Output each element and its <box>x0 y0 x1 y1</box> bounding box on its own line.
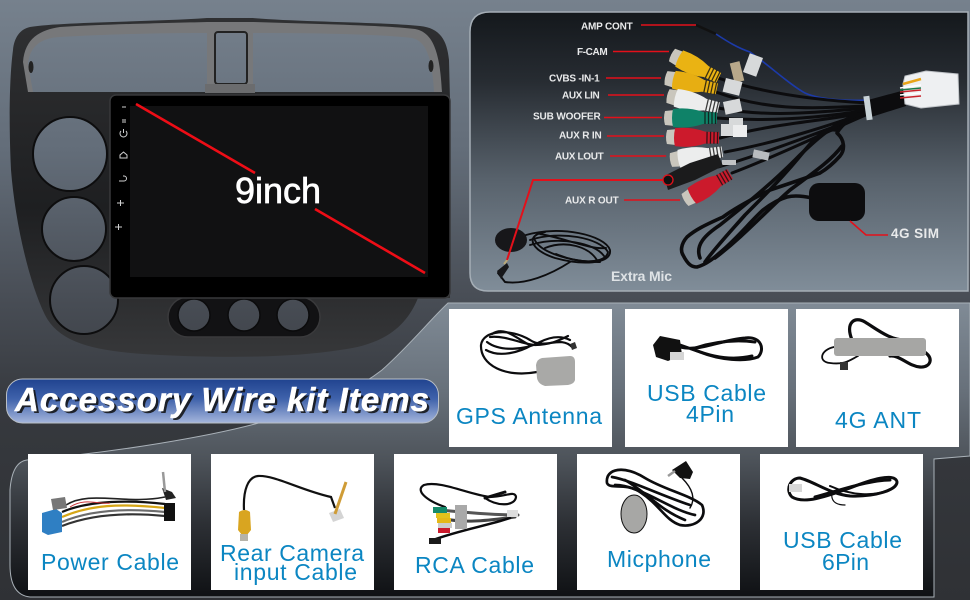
top silver trim <box>23 22 442 92</box>
round vent holes <box>33 117 118 334</box>
card: USB Cable 4Pin <box>625 309 788 447</box>
car head unit with dash frame <box>10 18 450 357</box>
screen bezel <box>110 95 450 298</box>
harness labels: 4G SIM <box>891 226 939 241</box>
4G SIM antenna cable <box>682 112 868 267</box>
wire tubes before connector <box>868 90 906 118</box>
mounting screws <box>28 60 434 73</box>
card: Rear Camera input Cable <box>211 454 374 590</box>
harness labels: SUB WOOFER <box>533 112 601 122</box>
card: Rear Camera input Cable: input Cable <box>234 559 358 585</box>
title banner: Accessory Wire kit Items <box>16 383 432 420</box>
leader lines <box>507 25 888 260</box>
card: USB Cable 4Pin: 4Pin <box>686 401 735 427</box>
lower buttons <box>178 299 309 331</box>
card: Power Cable <box>28 454 191 590</box>
title banner: Accessory Wire kit Items <box>14 381 429 418</box>
card: Micphone <box>577 454 740 590</box>
card: GPS Antenna <box>449 309 612 447</box>
centre vent slot <box>215 32 247 84</box>
right upper opening <box>253 33 434 92</box>
red diagonal lines <box>136 104 425 273</box>
harness labels: AUX LIN <box>562 90 600 102</box>
card: USB Cable 6Pin: USB Cable <box>783 527 903 553</box>
extra mic <box>495 228 610 283</box>
card: USB Cable 6Pin <box>760 454 923 590</box>
RCA connectors <box>663 46 735 209</box>
wire labels stickers <box>721 53 770 165</box>
display area <box>130 106 428 277</box>
side touch icons <box>115 107 127 230</box>
panel: accessory area background <box>10 303 970 597</box>
harness labels: AUX LOUT <box>555 152 604 162</box>
card: Rear Camera input Cable: Rear Camera <box>220 540 365 566</box>
card: RCA Cable <box>394 454 557 590</box>
card: 4G ANT: 4G ANT <box>835 407 922 433</box>
wires: blue amp wire <box>696 25 868 100</box>
4G SIM module <box>809 183 865 221</box>
cable tie <box>863 96 873 120</box>
card: RCA Cable: RCA Cable <box>415 552 535 578</box>
harness labels: F-CAM <box>577 47 608 58</box>
dash frame <box>10 18 450 357</box>
left upper opening <box>28 33 207 92</box>
card: GPS Antenna: GPS Antenna <box>456 403 603 429</box>
card: USB Cable 6Pin: 6Pin <box>822 549 870 575</box>
card: Power Cable: Power Cable <box>41 549 180 575</box>
card: Micphone: Micphone <box>607 546 712 572</box>
harness labels: AUX R IN <box>559 130 602 142</box>
panel: wiring harness <box>470 12 968 291</box>
connector block <box>900 71 959 108</box>
lower button surround <box>168 297 320 337</box>
harness labels: AUX R OUT <box>565 196 619 206</box>
card: USB Cable 4Pin: USB Cable <box>647 380 767 406</box>
harness labels <box>533 22 939 284</box>
harness labels: CVBS -IN-1 <box>549 74 600 84</box>
9inch label: 9inch <box>235 170 321 211</box>
harness labels: Extra Mic <box>611 268 672 284</box>
wires: signal bundle <box>716 78 868 173</box>
card: 4G ANT <box>796 309 959 447</box>
harness labels: AMP CONT <box>581 22 633 32</box>
